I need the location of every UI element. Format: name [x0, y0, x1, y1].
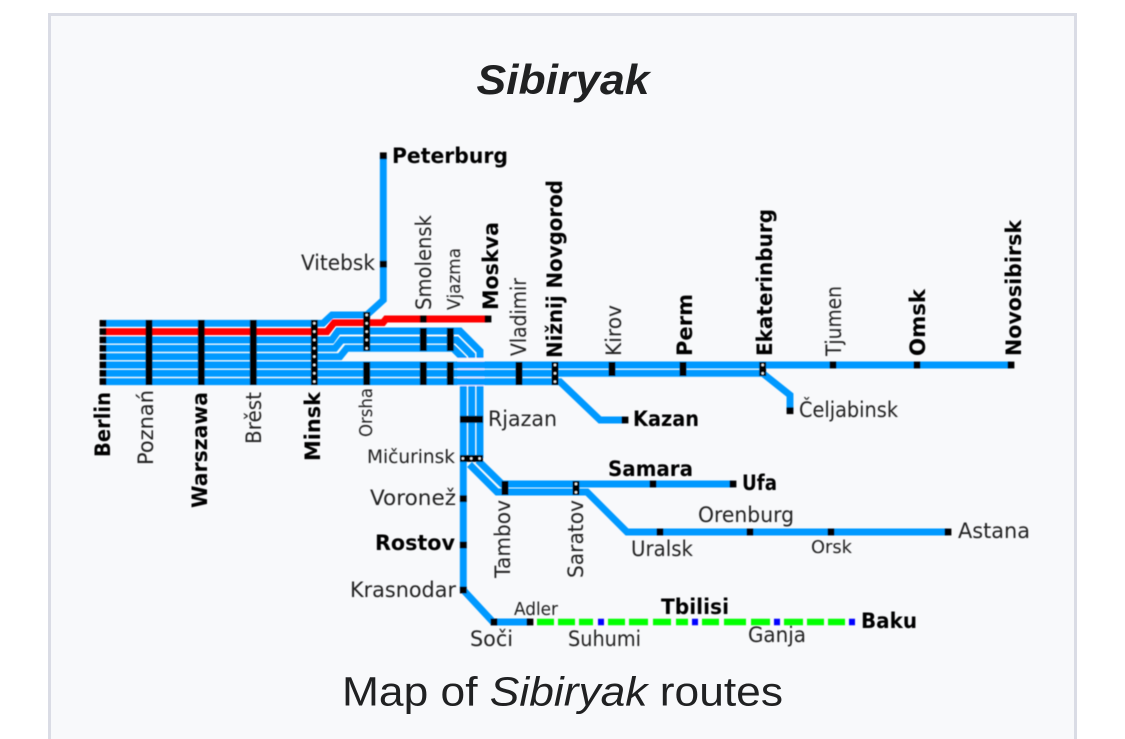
horizontal station labels: Voronež	[370, 486, 456, 510]
horizontal station labels: Mičurinsk	[367, 446, 455, 468]
rotated station labels: Minsk	[301, 391, 325, 461]
horizontal station labels: Orsk	[811, 537, 853, 558]
horizontal station labels: Tbilisi	[661, 595, 729, 619]
red track to Moskva	[103, 319, 488, 332]
rotated station labels: Omsk	[906, 288, 930, 356]
blue main tracks	[103, 156, 948, 622]
horizontal station labels: Astana	[958, 519, 1030, 543]
horizontal station labels: Uralsk	[631, 537, 694, 561]
horizontal station labels: Soči	[470, 627, 513, 651]
horizontal station labels: Vitebsk	[301, 251, 376, 275]
horizontal station labels: Rostov	[375, 531, 455, 555]
horizontal station labels: Čeljabinsk	[799, 397, 899, 422]
horizontal station labels: Adler	[514, 599, 559, 620]
horizontal station labels: Krasnodar	[350, 578, 456, 602]
rotated station labels: Ekaterinburg	[753, 209, 777, 356]
rotated station labels: Moskva	[479, 222, 503, 310]
rotated station labels: Kirov	[602, 305, 626, 356]
east-west through tracks	[103, 365, 1011, 420]
rotated station labels: Novosibirsk	[1002, 219, 1026, 356]
horizontal station labels: Orenburg	[698, 503, 794, 527]
rotated station labels: Nižnij Novgorod	[543, 180, 567, 358]
rotated station labels: Vladimir	[507, 278, 531, 356]
horizontal station labels: Rjazan	[488, 407, 557, 431]
horizontal station labels: Suhumi	[568, 627, 641, 651]
rotated station labels: Warszawa	[188, 392, 212, 508]
rotated station labels: Vjazma	[444, 248, 465, 310]
horizontal station labels: Peterburg	[392, 144, 508, 168]
horizontal station labels	[301, 144, 1030, 651]
route map	[91, 144, 1030, 651]
station markers	[103, 152, 1011, 625]
rotated station labels: Perm	[673, 294, 697, 356]
horizontal station labels: Kazan	[633, 407, 699, 431]
caption: Map of Sibiryak routes	[342, 668, 783, 714]
Caucasus line: green dashes and blue stops	[537, 619, 855, 625]
horizontal station labels: Baku	[861, 609, 917, 633]
rotated station labels	[91, 180, 1026, 579]
rotated station labels: Brěst	[242, 392, 266, 444]
rotated station labels: Saratov	[564, 500, 588, 578]
rotated station labels: Orsha	[356, 388, 377, 437]
horizontal station labels: Samara	[608, 457, 693, 481]
rotated station labels: Poznań	[134, 390, 158, 465]
rotated station labels: Berlin	[91, 392, 115, 457]
title: Sibiryak	[476, 56, 652, 103]
rotated station labels: Tambov	[491, 500, 515, 579]
horizontal station labels: Ganja	[748, 623, 806, 647]
rotated station labels: Tjumen	[822, 286, 846, 357]
rotated station labels: Smolensk	[412, 214, 436, 310]
horizontal station labels: Ufa	[742, 471, 777, 495]
crossing gap in vertical tracks	[458, 358, 484, 386]
